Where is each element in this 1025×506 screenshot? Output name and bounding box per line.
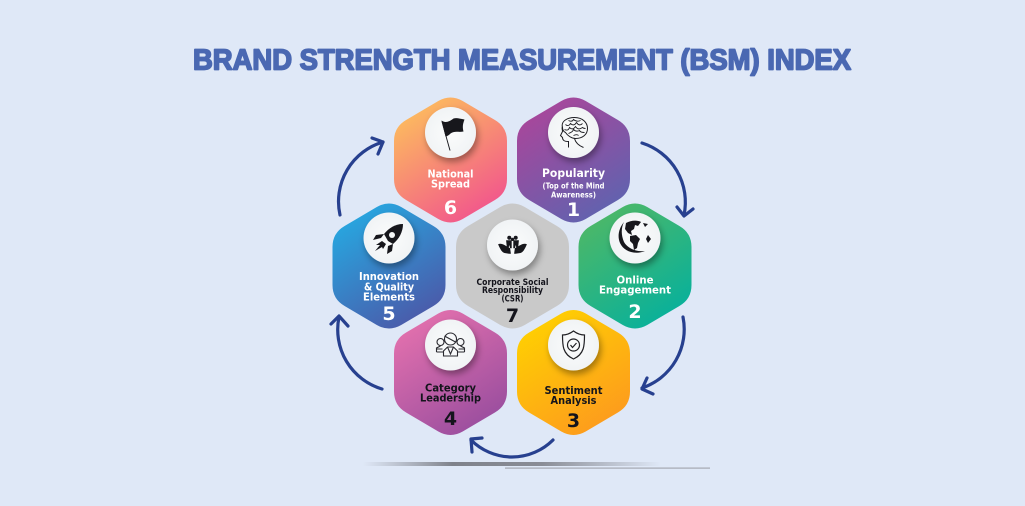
hexagon 5: Innovation and Quality Elements: 5: [382, 303, 396, 325]
hexagon 2: Online Engagement: Engagement: [599, 284, 671, 296]
hexagon 5: Innovation and Quality Elements: [332, 204, 446, 328]
label: Popularity: [542, 166, 605, 180]
label: Category: [425, 382, 476, 394]
hexagon 3: Sentiment Analysis: 3: [567, 410, 580, 432]
label: National: [428, 168, 474, 180]
hexagon 1: Popularity: 1: [567, 199, 580, 221]
ground shadow: [363, 462, 710, 469]
hexagon 7: Corporate Social Responsibility: 7: [506, 305, 519, 327]
label: Online: [616, 274, 654, 286]
label: Sentiment: [544, 385, 602, 397]
hexagon 6: National Spread: 6: [444, 197, 457, 219]
label: Innovation: [359, 270, 419, 283]
hexagon 2: Online Engagement: 2: [628, 301, 642, 323]
hexagon 7: Corporate Social Responsibility: [456, 204, 569, 328]
arrow: 5 to 6: [339, 138, 383, 215]
icon: leadership people: [436, 333, 464, 356]
hexagon 6: National Spread: [394, 98, 507, 222]
arrow: 1 to 2: [642, 143, 693, 216]
hexagon 1: Popularity: Awareness): [551, 190, 596, 200]
icon: brain head: [560, 118, 588, 148]
hexagon 4: Category Leadership: 4: [444, 408, 457, 430]
hexagon 5: Innovation and Quality Elements: Elements: [363, 290, 415, 304]
icon: rocket: [373, 224, 403, 254]
hexagon 7: Corporate Social Responsibility: (CSR): [502, 294, 524, 304]
hexagon 1: Popularity: (Top of the Mind: [542, 182, 604, 190]
hexagon 2: Online Engagement: [578, 204, 692, 328]
label: Corporate Social: [476, 278, 548, 288]
hexagon 7: Corporate Social Responsibility: Responsibility: [482, 286, 543, 296]
hexagon 5: Innovation and Quality Elements: & Quality: [364, 280, 414, 294]
arrow: 2 to 3: [642, 317, 684, 394]
hexagon 4: Category Leadership: Leadership: [420, 392, 481, 404]
icon: shield: [562, 331, 584, 359]
title: BRAND STRENGTH MEASUREMENT (BSM) INDEX: [193, 44, 852, 76]
icon: globe: [619, 221, 651, 253]
hexagon 4: Category Leadership: [394, 310, 507, 435]
icon: flag: [442, 118, 464, 150]
icon: hands and people: [498, 236, 527, 254]
hexagon 1: Popularity: [517, 98, 630, 222]
hexagon 6: National Spread: Spread: [431, 178, 470, 190]
arrow: 3 to 4: [471, 438, 553, 457]
arrow: 4 to 5: [331, 316, 382, 389]
hexagon 3: Sentiment Analysis: Analysis: [550, 395, 596, 407]
hexagon 3: Sentiment Analysis: [517, 310, 630, 435]
